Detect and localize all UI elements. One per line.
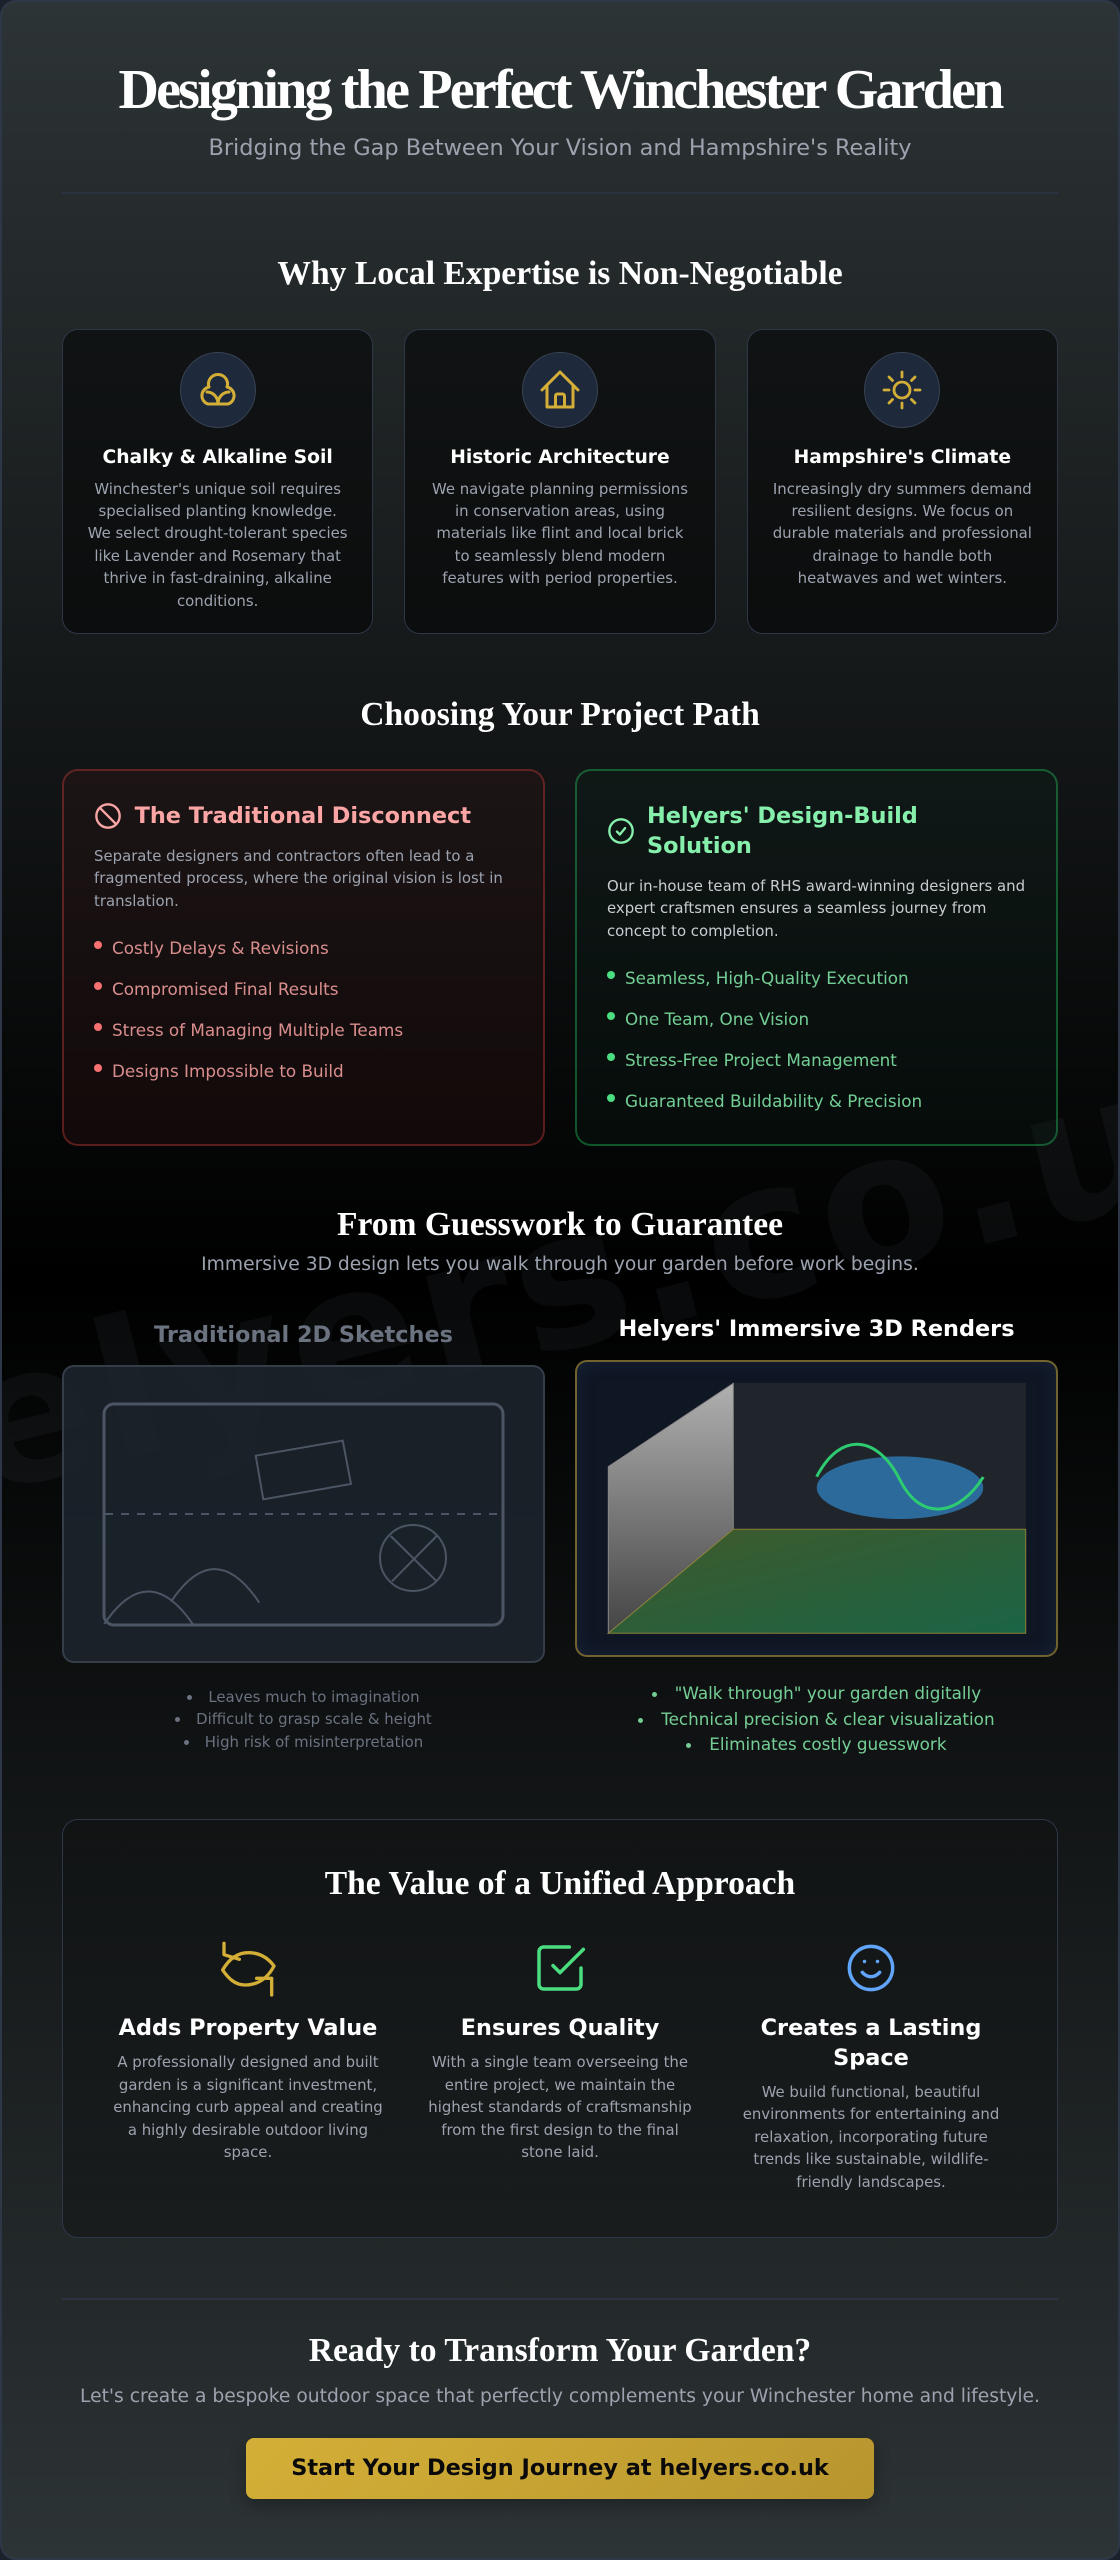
panel: traditional disconnect [62,769,545,1146]
card text: in conservation areas, using [455,502,665,520]
list: render benefits: "Walk through" your garden digitally [675,1683,981,1703]
panel text [607,877,1025,940]
card text: features with period properties. [442,569,678,587]
value text: With a single team overseeing the [432,2053,688,2071]
heading: project path: Choosing Your Project Path [360,696,760,732]
card text [88,480,348,610]
list: sketch drawbacks: Leaves much to imagination [208,1688,420,1706]
panel heading: Solution [647,832,752,858]
heading: call to action: Ready to Transform Your Garden? [309,2332,811,2368]
list: benefits [607,968,922,1111]
card text: heatwaves and wet winters. [798,569,1007,587]
panel text: concept to completion. [607,922,779,940]
value text: A professionally designed and built [117,2053,379,2071]
value text: friendly landscapes. [796,2173,946,2191]
value text: relaxation, incorporating future [754,2128,988,2146]
card text: specialised planting knowledge. [98,502,337,520]
card text: We select drought-tolerant species [88,524,348,542]
value text: from the first design to the final [441,2121,679,2139]
value column: quality [428,2015,692,2161]
card text: materials like flint and local brick [436,524,684,542]
list: problems: Stress of Managing Multiple Teams [112,1020,403,1040]
button: design journey: Start Your Design Journey at helyers.co.uk [291,2455,829,2481]
label: 3D renders: Helyers' Immersive 3D Renders [618,1316,1015,1342]
value text [743,2083,999,2191]
value text: environments for entertaining and [743,2105,999,2123]
card text: to seamlessly blend modern [455,547,665,565]
icon: exchange value [221,1942,276,1997]
panel text [94,847,503,910]
value text: stone laid. [521,2143,599,2161]
value title: Ensures Quality [461,2015,659,2041]
panel: unified approach [62,1819,1058,2238]
sketch panel [62,1365,545,1663]
value text: We build functional, beautiful [762,2083,980,2101]
value text: trends like sustainable, wildlife- [753,2150,989,2168]
panel heading: Helyers' Design-Build [647,802,918,828]
list: render benefits: Technical precision & clear visualization [661,1709,995,1729]
list: problems [94,938,403,1081]
card title: Hampshire's Climate [794,447,1011,468]
list: benefits: Seamless, High-Quality Execution [625,968,909,988]
icon: house [522,352,598,428]
heading: why local expertise: Why Local Expertise is Non-Negotiable [277,254,843,292]
icon: check circle [608,818,634,844]
3D garden render [607,1382,1026,1634]
section subtitle: Immersive 3D design lets you walk through your garden before work begins. [201,1254,919,1275]
icon: smile [848,1944,894,1992]
card text: conditions. [177,592,258,610]
list: problems: Costly Delays & Revisions [112,938,329,958]
card title: Chalky & Alkaline Soil [103,447,333,468]
list: benefits: Guaranteed Buildability & Precision [625,1091,922,1111]
icon: check square [537,1945,586,1991]
icon: ban [95,803,121,829]
value title: Creates a Lasting [761,2015,981,2041]
panel text: Separate designers and contractors often lead to a [94,847,474,865]
card text: We navigate planning permissions [432,480,688,498]
value text: space. [224,2143,272,2161]
value text: highest standards of craftsmanship [428,2098,692,2116]
value text: entire project, we maintain the [445,2076,675,2094]
card: climate [747,329,1058,634]
list: render benefits: Eliminates costly guesswork [709,1734,947,1754]
subtitle: Bridging the Gap Between Your Vision and Hampshire's Reality [208,134,912,160]
list: benefits: Stress-Free Project Management [625,1050,897,1070]
render panel [575,1360,1058,1657]
heading: guesswork: From Guesswork to Guarantee [337,1206,783,1243]
card: chalky soil [62,329,373,634]
panel: design-build solution [575,769,1058,1146]
panel heading: The Traditional Disconnect [135,802,471,828]
list: render benefits [638,1683,995,1754]
list: sketch drawbacks: High risk of misinterpretation [205,1733,423,1751]
list: problems: Compromised Final Results [112,979,338,999]
title: Designing the Perfect Winchester Garden [118,59,1002,121]
card text: like Lavender and Rosemary that [94,547,341,565]
button: design journey [246,2438,874,2499]
value column: property [113,2015,383,2161]
value text: garden is a significant investment, [119,2076,377,2094]
card: historic architecture [404,329,716,634]
value title [761,2015,981,2071]
panel text: Our in-house team of RHS award-winning designers and [607,877,1025,895]
panel heading [647,802,918,858]
list: sketch drawbacks: Difficult to grasp scale & height [196,1710,432,1728]
label: 2D sketches: Traditional 2D Sketches [154,1322,453,1348]
value text [113,2053,383,2161]
card text: thrive in fast-draining, alkaline [104,569,332,587]
list: problems: Designs Impossible to Build [112,1061,344,1081]
card title: Historic Architecture [450,447,670,468]
card text: resilient designs. We focus on [791,502,1013,520]
card text: Winchester's unique soil requires [94,480,341,498]
card text [773,480,1032,587]
list: sketch drawbacks [175,1688,432,1751]
value title: Adds Property Value [119,2015,377,2041]
list: benefits: One Team, One Vision [625,1009,809,1029]
value text [428,2053,692,2161]
panel text: translation. [94,892,179,910]
value column: lasting space [743,2015,999,2191]
card text: Increasingly dry summers demand [773,480,1032,498]
icon: soil plant [180,352,256,428]
2D plan drawing [102,1402,504,1626]
icon: sun [864,352,940,428]
value text: enhancing curb appeal and creating [113,2098,383,2116]
value text: a highly desirable outdoor living [128,2121,368,2139]
card text [432,480,688,587]
panel heading: The Value of a Unified Approach [325,1865,795,1902]
panel text: fragmented process, where the original vision is lost in [94,869,503,887]
panel text: expert craftsmen ensures a seamless journey from [607,899,986,917]
value title: Space [833,2045,909,2071]
card text: durable materials and professional [773,524,1032,542]
call to action text: Let's create a bespoke outdoor space that perfectly complements your Winchester home and lifestyle. [80,2386,1040,2407]
card text: drainage to handle both [812,547,992,565]
